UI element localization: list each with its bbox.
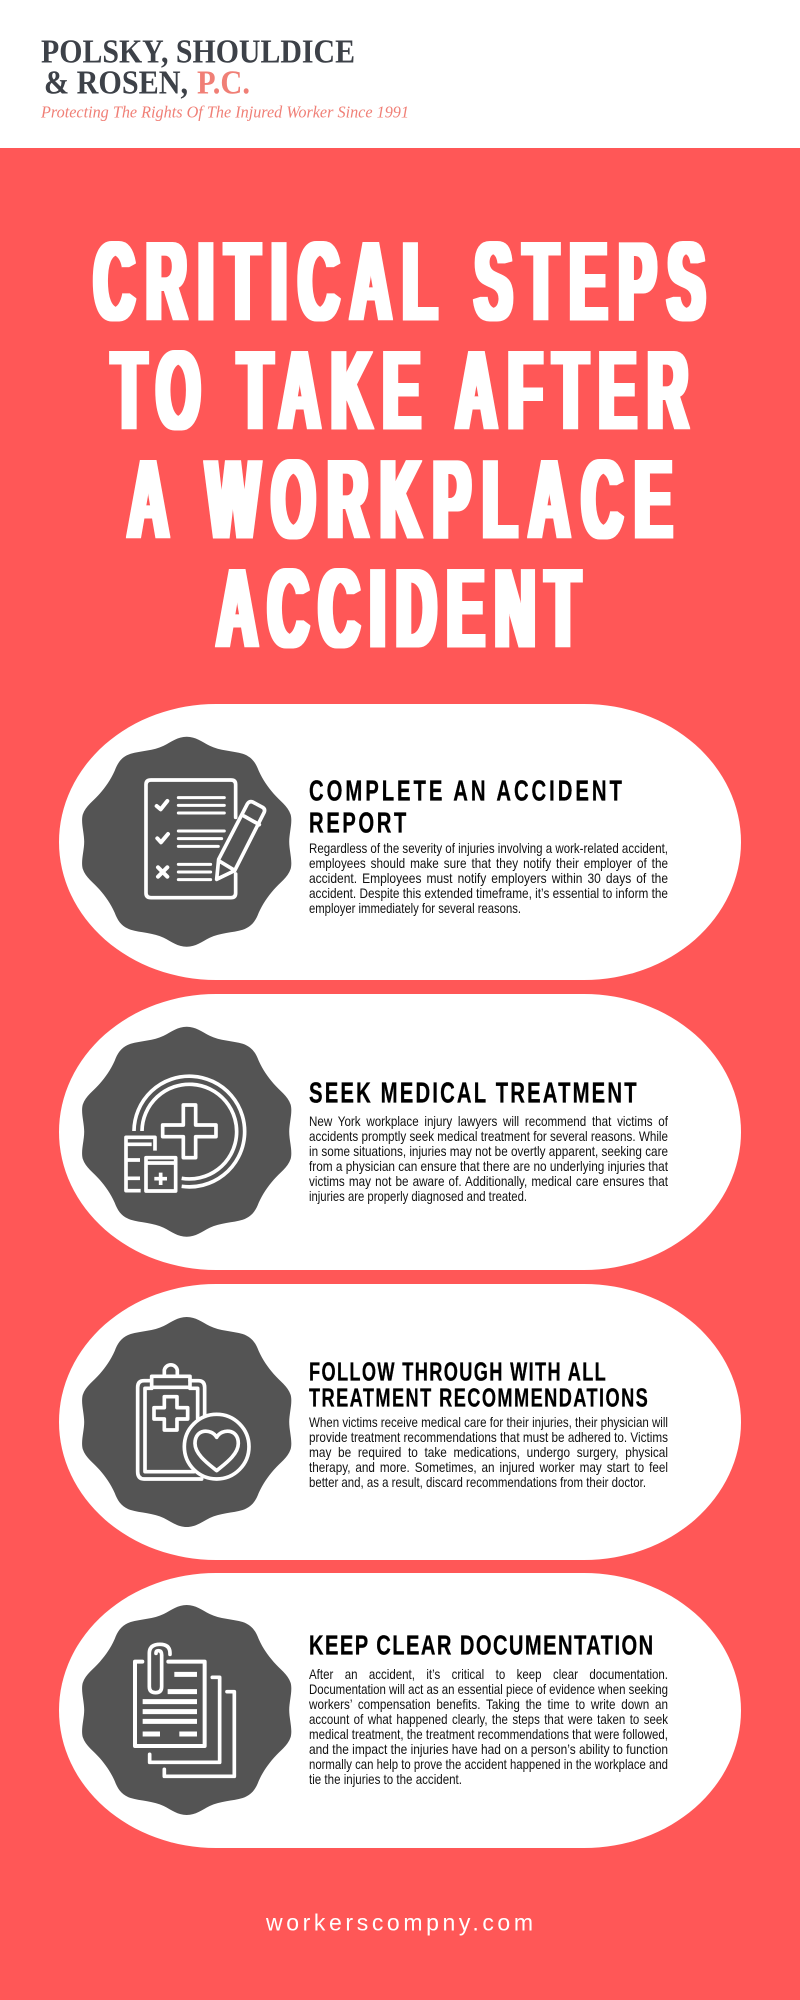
body text: [308, 1666, 669, 1787]
heading: SEEK MEDICAL TREATMENT: [309, 1077, 637, 1110]
body text: injuries are properly diagnosed and treated.: [309, 1188, 527, 1204]
heading: REPORT: [309, 807, 407, 840]
body text: employer immediately for several reasons.: [309, 900, 521, 916]
icon: checklist and pencil: [146, 780, 265, 898]
badge: [82, 1605, 291, 1815]
icon: clipboard and heart: [138, 1365, 249, 1479]
badge: [82, 737, 291, 947]
body text: Documentation will act as an essential piece of evidence when seeking: [309, 1681, 668, 1697]
body text: New York workplace injury lawyers will recommend that victims of: [309, 1113, 668, 1129]
badge: [82, 1027, 291, 1237]
body text: accident. Despite this extended timeframe, it’s essential to inform the: [309, 885, 668, 901]
body text: may be required to take medications, undergo surgery, physical: [309, 1444, 668, 1460]
heading: KEEP CLEAR DOCUMENTATION: [309, 1630, 653, 1661]
logo: firm name: [41, 34, 355, 101]
title: ACCIDENT: [217, 546, 580, 671]
title: CRITICAL STEPS: [94, 219, 705, 344]
panel: seek medical treatment: [59, 994, 741, 1270]
body text: [309, 1414, 668, 1490]
body text: normally can help to prove the accident happened in the workplace and: [309, 1756, 668, 1772]
body text: [309, 1113, 668, 1204]
icon: medical cross and bottles: [126, 1076, 245, 1191]
heading: TREATMENT RECOMMENDATIONS: [309, 1384, 648, 1412]
body text: provide treatment recommendations that must be adhered to. Victims: [309, 1429, 668, 1445]
panel: keep clear documentation: [59, 1573, 741, 1848]
panel: complete an accident report: [59, 704, 741, 980]
panel: follow through with all treatment recommendations: [59, 1284, 741, 1560]
body text: [309, 840, 668, 916]
heading: [309, 1358, 648, 1412]
body text: workers’ compensation benefits. Taking the time to write down an: [308, 1696, 668, 1712]
body text: and the impact the injuries have had on a person’s ability to function: [309, 1741, 668, 1757]
body text: medical treatment, the treatment recommendations that were followed,: [309, 1726, 668, 1742]
badge: [82, 1317, 291, 1527]
body text: employees should make sure that they notify their employer of the: [309, 855, 668, 871]
title: TO TAKE AFTER: [112, 328, 688, 453]
body text: tie the injuries to the accident.: [309, 1771, 462, 1787]
title: A WORKPLACE: [128, 437, 672, 562]
footer website: workerscompny.com: [265, 1910, 533, 1936]
body text: therapy, and more. Sometimes, an injured worker may start to feel: [309, 1459, 668, 1475]
header band: [0, 0, 800, 148]
body text: in some situations, injuries may not be overtly apparent, seeking care: [309, 1143, 668, 1159]
body text: victims may not be aware of. Additionally, medical care ensures that: [309, 1173, 668, 1189]
tagline: Protecting The Rights Of The Injured Worker Since 1991: [40, 103, 409, 122]
body text: After an accident, it’s critical to keep clear documentation.: [309, 1666, 668, 1682]
body text: When victims receive medical care for their injuries, their physician will: [309, 1414, 668, 1430]
heading: [309, 775, 622, 840]
body text: Regardless of the severity of injuries involving a work-related accident,: [309, 840, 668, 856]
logo: firm name: & ROSEN,: [44, 64, 188, 101]
heading: COMPLETE AN ACCIDENT: [309, 775, 622, 808]
body text: accident. Employees must notify employers within 30 days of the: [309, 870, 668, 886]
body text: better and, as a result, discard recommendations from their doctor.: [309, 1474, 646, 1490]
body text: account of what happened clearly, the steps that were taken to seek: [309, 1711, 669, 1727]
body text: from a physician can ensure that there are no underlying injuries that: [309, 1158, 668, 1174]
logo: firm name: P.C.: [197, 64, 250, 101]
title: [94, 219, 705, 671]
logo: firm name: POLSKY, SHOULDICE: [41, 34, 355, 71]
heading: FOLLOW THROUGH WITH ALL: [309, 1358, 606, 1386]
icon: paper-clipped documents: [135, 1644, 234, 1776]
body text: accidents promptly seek medical treatment for several reasons. While: [309, 1128, 668, 1144]
